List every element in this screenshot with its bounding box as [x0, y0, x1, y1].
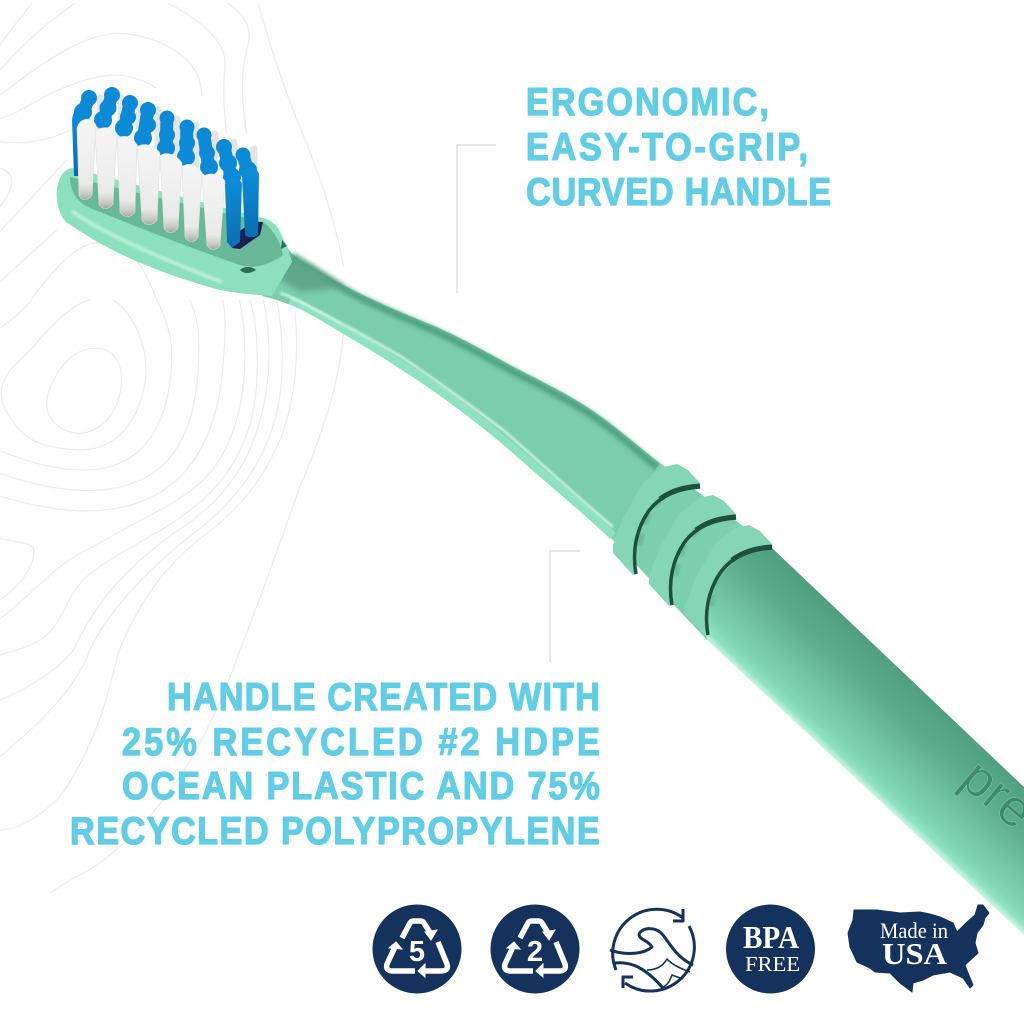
toothbrush head outline [57, 168, 292, 296]
handle shaft [262, 247, 660, 540]
text block: ergonomic handle: CURVED HANDLE [526, 170, 831, 213]
highlight along head rim [72, 211, 222, 282]
callout leader line: handle grip [457, 145, 496, 293]
text block: recycled material [70, 675, 600, 852]
grip ring 3 [685, 525, 772, 636]
callout leader line: recycled material [550, 551, 580, 662]
icon: ocean wave recycling [610, 909, 694, 991]
neck shadow [268, 252, 345, 292]
grip ring 1 [613, 464, 700, 575]
handle lower section [705, 548, 1024, 935]
left tall blue tuft [72, 106, 88, 176]
text block: recycled material: OCEAN PLASTIC AND 75% [122, 764, 600, 807]
toothbrush illustration [57, 87, 1024, 935]
shaft lower band [290, 300, 613, 536]
grip section base [613, 463, 772, 640]
head inner plate [70, 177, 283, 267]
right blue tuft, front [225, 177, 242, 248]
neck shadow spots [240, 240, 287, 273]
icon: recycling code 5: 5 [409, 936, 425, 968]
right blue tuft, back [242, 167, 259, 237]
icon: BPA free [726, 904, 815, 994]
navy bristle base [232, 222, 263, 249]
white front tufts [77, 119, 225, 250]
icon: BPA free: BPA [743, 919, 799, 955]
text block: ergonomic handle: EASY-TO-GRIP, [526, 125, 808, 168]
text block: recycled material: HANDLE CREATED WITH [167, 675, 600, 718]
grip ring 2 [649, 495, 736, 606]
icon: recycling code 2: 2 [527, 936, 543, 968]
icon: made in USA map: Made in [880, 918, 948, 943]
text block: recycled material: RECYCLED POLYPROPYLENE [70, 809, 600, 852]
icon: made in USA map: USA [882, 936, 948, 971]
icon: recycling code 2 [490, 904, 580, 994]
text block: recycled material: 25% RECYCLED #2 HDPE [122, 720, 600, 763]
text block: ergonomic handle: ERGONOMIC, [526, 80, 769, 123]
text block: ergonomic handle [526, 80, 831, 213]
blue bristle clusters [83, 95, 248, 180]
icon: BPA free: FREE [745, 952, 800, 976]
blue bristle cluster tips [74, 87, 257, 186]
shaft upper shadow [292, 256, 658, 468]
icon: recycling code 5 [372, 904, 462, 994]
icon: made in USA map [848, 905, 989, 992]
back row of white bristles [100, 98, 254, 185]
bristles [72, 87, 263, 250]
shaft lower highlight [280, 293, 613, 527]
background: topographic contour lines [0, 3, 343, 893]
